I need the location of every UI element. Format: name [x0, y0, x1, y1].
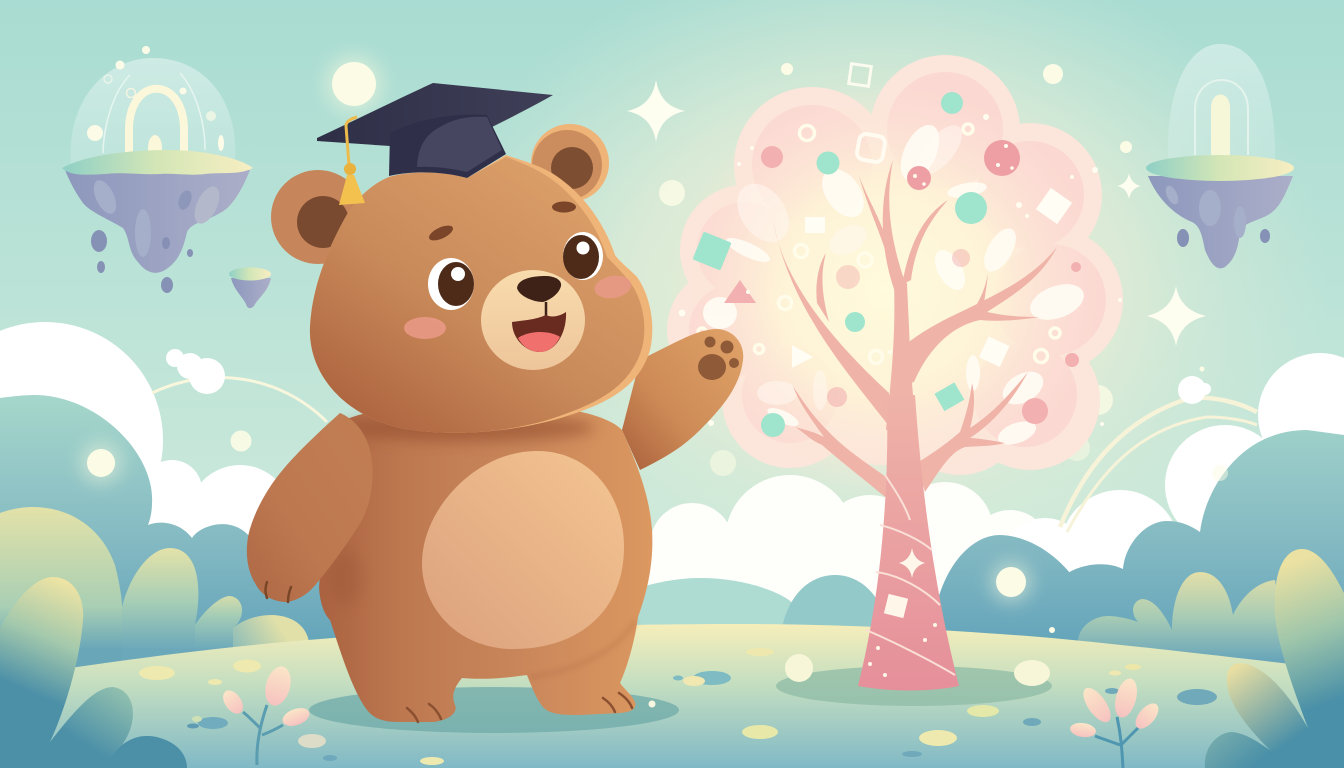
- nose stem: [545, 302, 547, 316]
- white petals: [703, 119, 1089, 449]
- left sprout: [219, 664, 312, 765]
- cap highlight: [417, 117, 502, 172]
- sprinkled dots: [678, 114, 1122, 426]
- left eye: [428, 258, 474, 310]
- chin shadow: [345, 414, 595, 442]
- rock: [1148, 176, 1293, 268]
- clouds: centre: [640, 475, 1070, 605]
- bushes left: [0, 507, 309, 680]
- under-arm shadow: [330, 550, 362, 606]
- floating island left: [62, 46, 253, 293]
- head: [310, 157, 644, 433]
- bear body: [319, 402, 652, 722]
- mouth: [512, 312, 566, 352]
- distant hills right: [1060, 430, 1344, 680]
- ground pebbles: [139, 648, 1217, 765]
- tongue: [518, 332, 560, 352]
- cap body: [389, 115, 506, 178]
- right sprout: [1069, 676, 1163, 768]
- tree base stones: [785, 654, 1050, 686]
- bubbles: [87, 46, 224, 151]
- translucent petals: [727, 118, 970, 410]
- dome: [71, 58, 235, 165]
- leg crease: [530, 620, 636, 677]
- trunk shapes: [868, 548, 937, 677]
- left ear: [271, 170, 365, 264]
- small island: [229, 268, 271, 308]
- drips: [1177, 229, 1270, 247]
- distant hills left: [0, 395, 340, 660]
- bear right arm: [622, 329, 743, 470]
- tree crown: [667, 55, 1123, 495]
- right ear: [531, 124, 609, 202]
- grass top: [1146, 155, 1294, 181]
- tassel cord: [346, 117, 357, 165]
- bear left arm: [247, 413, 373, 602]
- foreground leaves left: [0, 577, 187, 768]
- cap board: [317, 83, 553, 146]
- door: [1211, 94, 1230, 160]
- graduation cap: [317, 83, 553, 205]
- arcs right: [1060, 398, 1257, 532]
- ground hill: [0, 624, 1344, 768]
- arc left: [152, 377, 327, 422]
- head rim: [310, 155, 652, 433]
- nose: [517, 276, 561, 302]
- glowing arch: [129, 89, 184, 155]
- claws left hand: [266, 582, 291, 602]
- arch door: [148, 135, 162, 161]
- muzzle: [481, 270, 585, 370]
- glowing orbs: [87, 62, 1228, 633]
- clouds: right: [1003, 353, 1344, 610]
- crown outer lobes: [667, 55, 1123, 475]
- distant hills centre: [620, 535, 1090, 645]
- bushes right: [1078, 572, 1290, 680]
- eyebrows: [427, 202, 576, 243]
- rock: [65, 170, 250, 273]
- sparkle stars: [627, 80, 1206, 346]
- trunk details: [866, 475, 955, 675]
- background glow behind the tree: [430, 0, 1330, 620]
- rock facets: [89, 177, 225, 257]
- dome: [1168, 44, 1275, 165]
- crown inner lobes: [689, 72, 1106, 447]
- bear: [247, 83, 743, 722]
- trunk: [858, 395, 959, 690]
- tree shadow: [776, 666, 1052, 706]
- dome inner lines: [103, 73, 205, 153]
- rings: [698, 124, 1060, 364]
- clouds: left: [0, 322, 300, 580]
- crown centre glow: [670, 85, 1100, 495]
- right eye: [563, 232, 603, 280]
- white squares: [792, 64, 1072, 368]
- small cloud right: [1178, 376, 1211, 404]
- orb halos: [81, 56, 1031, 602]
- mint shapes: [692, 92, 987, 437]
- bear belly: [422, 451, 624, 649]
- tree branches: [773, 160, 1057, 497]
- bear shadow: [309, 687, 679, 733]
- cheeks: [404, 273, 633, 339]
- inner arch: [1195, 80, 1248, 155]
- grass top: [62, 150, 253, 175]
- toe marks: [407, 693, 632, 722]
- floating island right: [1146, 44, 1294, 268]
- foreground leaves right: [1205, 549, 1344, 768]
- rose shapes: [724, 140, 1081, 424]
- drips: [91, 230, 193, 293]
- tassel: [339, 163, 365, 205]
- rock facets: [1163, 184, 1246, 238]
- paw pads: [698, 336, 739, 380]
- small cloud left: [166, 349, 225, 394]
